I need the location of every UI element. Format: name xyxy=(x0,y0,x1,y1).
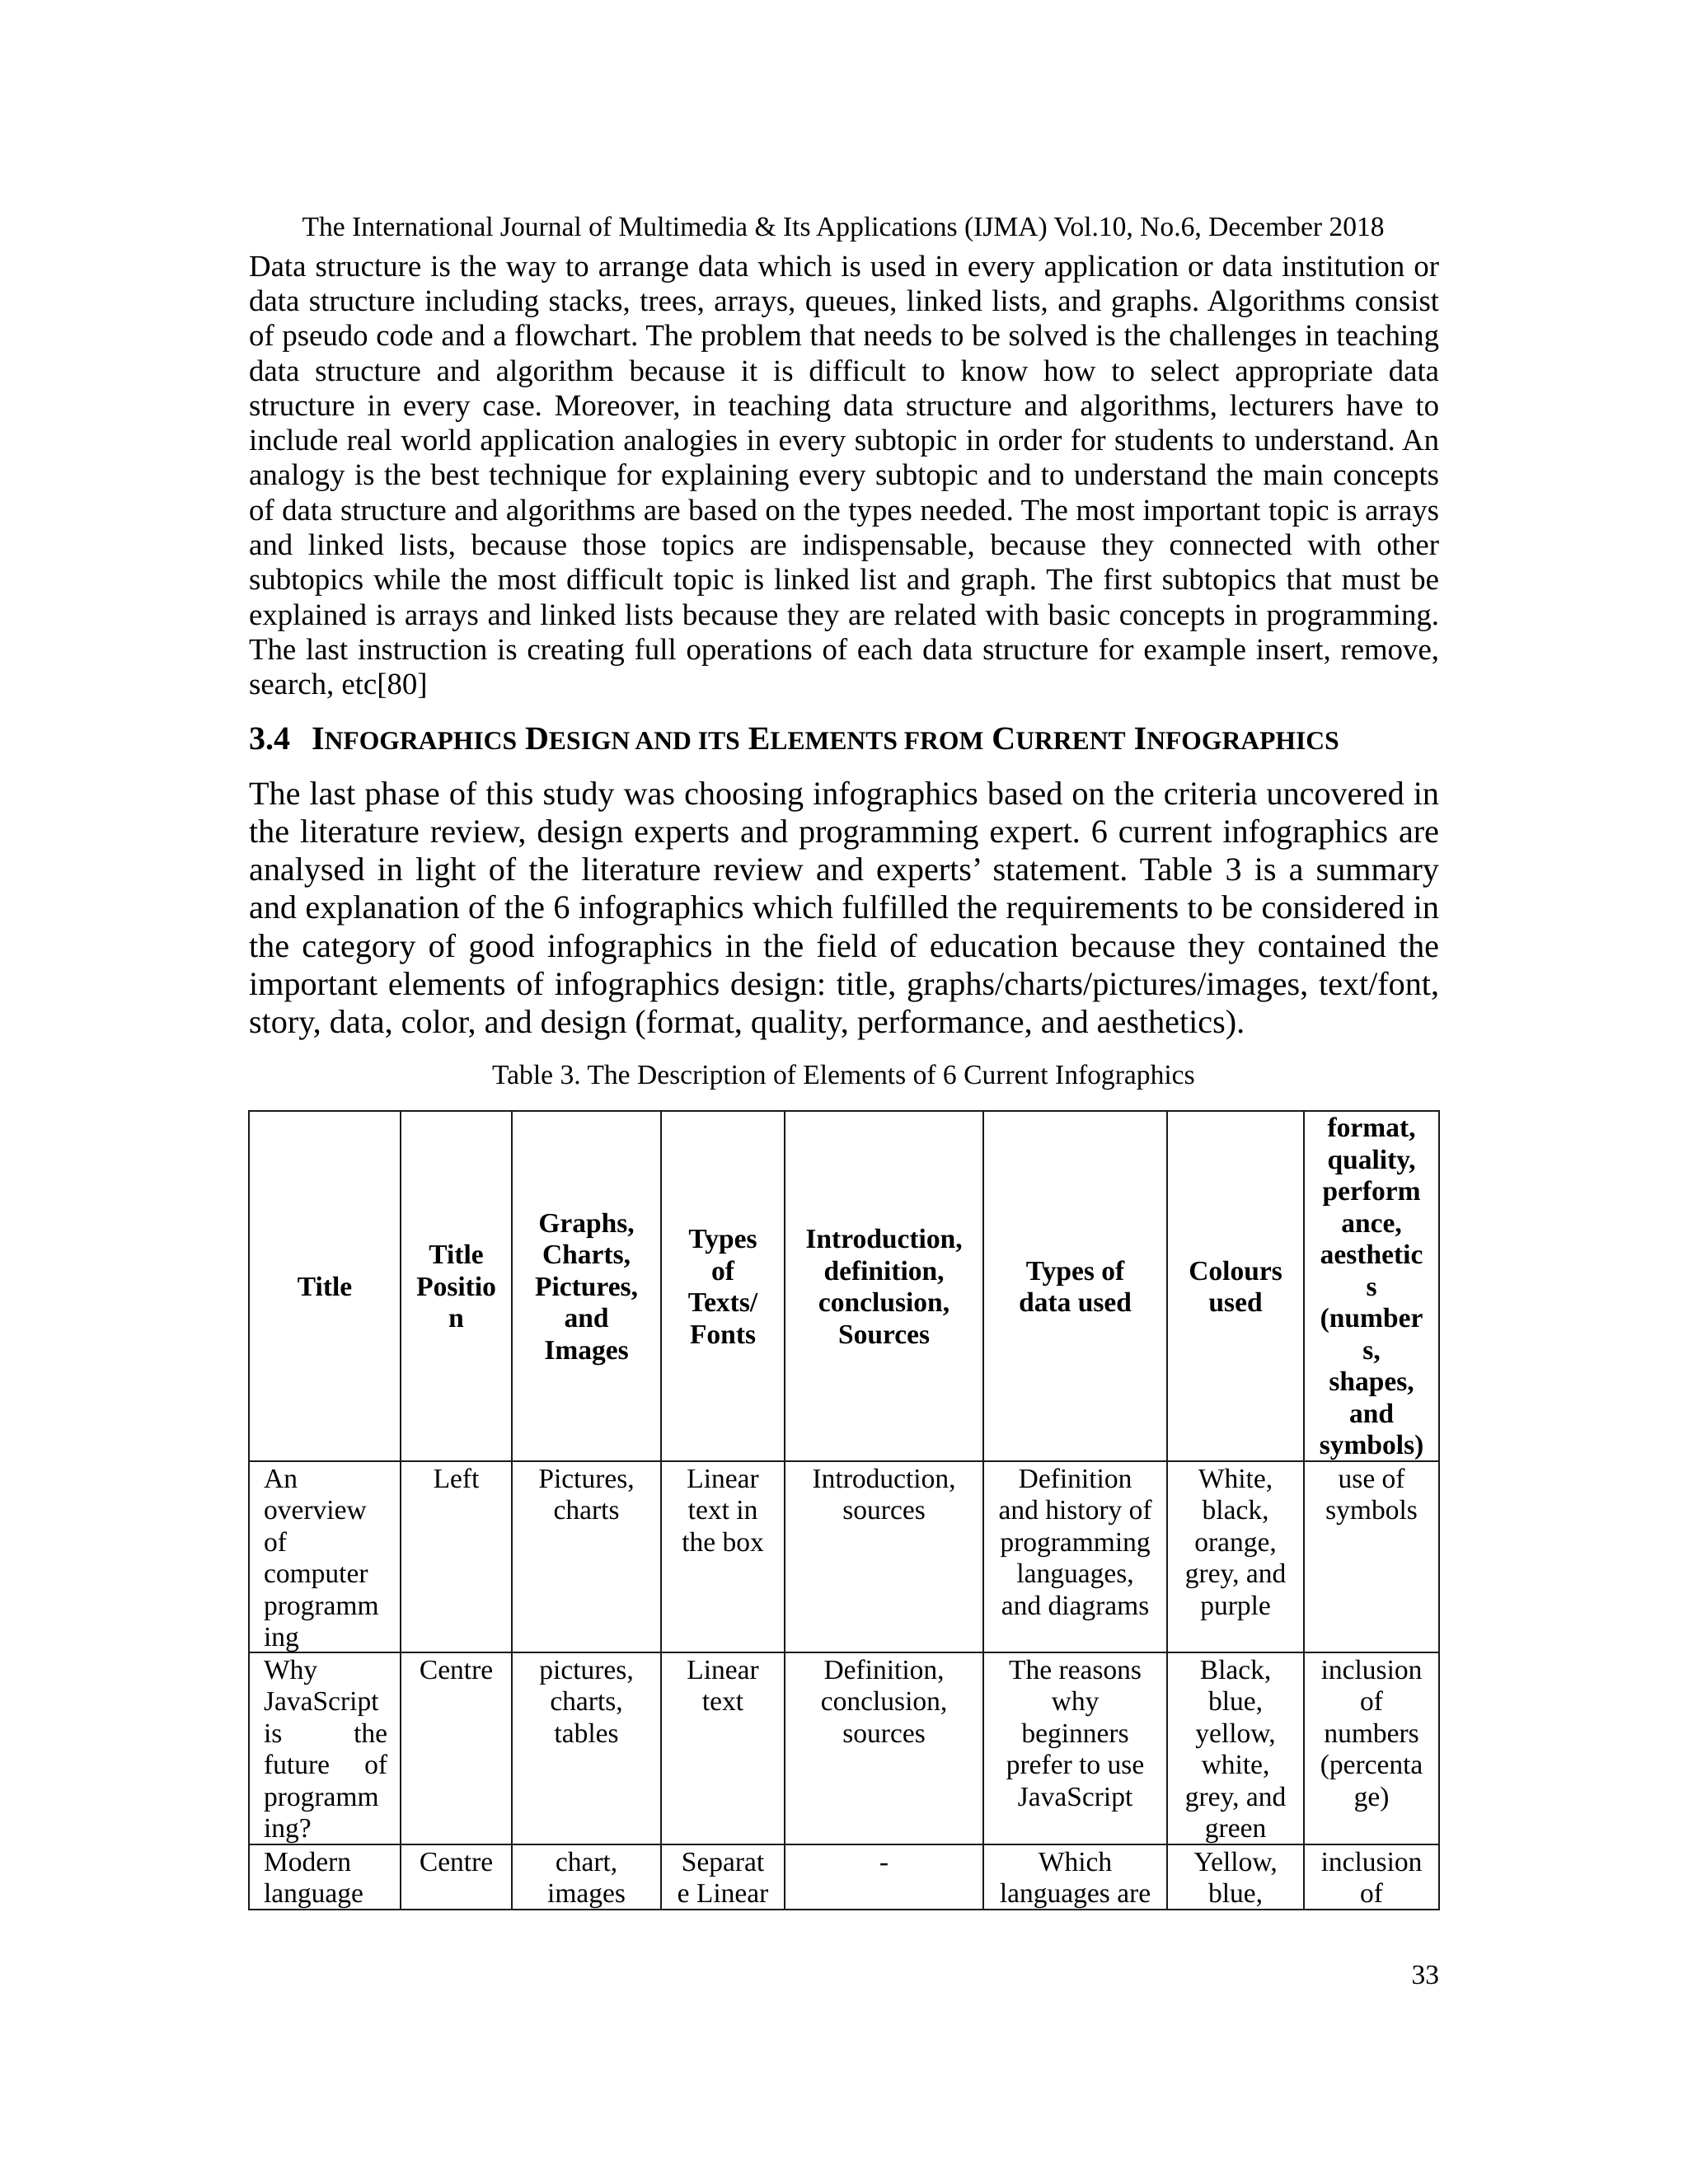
header cell: format, quality, performance, aesthetics: symbols) xyxy=(1320,1430,1423,1460)
table 3: elements of infographics xyxy=(248,1110,1440,1910)
cell: title xyxy=(250,1462,400,1652)
header cell: Types of Texts/Fonts: of xyxy=(711,1256,734,1286)
header cell: format, quality, performance, aesthetics: shapes, xyxy=(1329,1366,1414,1397)
header cell: Types of data used: Types of xyxy=(1026,1256,1124,1286)
table row: Why JavaScript is the future of programming? xyxy=(250,1653,1438,1844)
cell: graphics: images xyxy=(547,1878,626,1909)
cell: graphics: tables xyxy=(554,1718,619,1749)
header cell: Colours used xyxy=(1168,1112,1303,1460)
cell: title: ing? xyxy=(264,1813,312,1844)
cell: title: computer xyxy=(264,1558,368,1589)
cell: colours: white, xyxy=(1202,1750,1269,1780)
header cell: Title Position xyxy=(401,1112,511,1460)
cell: data types: The reasons xyxy=(1009,1655,1142,1685)
text block: last phase of study paragraph: The last phase of this study was choosing infographics based on the criteria uncovered in xyxy=(249,775,1439,812)
cell: format xyxy=(1305,1845,1438,1909)
cell: text types: the box xyxy=(682,1526,764,1558)
cell: colours: Yellow, xyxy=(1193,1846,1278,1877)
cell: data types xyxy=(984,1653,1166,1844)
cell: colours: White, xyxy=(1198,1464,1273,1493)
cell: introduction: Introduction, xyxy=(813,1464,955,1493)
cell: colours: purple xyxy=(1200,1591,1271,1620)
cell: text types: text xyxy=(702,1686,743,1717)
cell: title: programm xyxy=(264,1591,379,1620)
cell: data types: and history of xyxy=(998,1495,1152,1526)
cell: introduction: sources xyxy=(842,1718,926,1749)
cell: text types xyxy=(662,1653,784,1844)
cell: position xyxy=(401,1653,511,1844)
text block: data structure paragraph: search, etc[80] xyxy=(249,667,428,701)
cell: text types: e Linear xyxy=(678,1878,768,1909)
header cell: format, quality, performance, aesthetics xyxy=(1305,1112,1438,1460)
cell: format: inclusion xyxy=(1321,1655,1422,1685)
cell: format: use of xyxy=(1339,1464,1404,1493)
cell: colours: yellow, xyxy=(1195,1718,1276,1749)
cell: position xyxy=(401,1462,511,1652)
text block: last phase of study paragraph: and explanation of the 6 infographics which fulfilled the requirements to be considered in xyxy=(249,888,1439,926)
cell: graphics xyxy=(513,1653,660,1844)
text block: data structure paragraph: Data structure is the way to arrange data which is used in every application or data institution or xyxy=(249,249,1439,283)
header cell: Title: Title xyxy=(298,1272,352,1302)
cell: graphics: charts, xyxy=(550,1686,623,1717)
header cell: format, quality, performance, aesthetics: (number xyxy=(1320,1303,1423,1333)
cell: text types xyxy=(662,1845,784,1909)
header cell: format, quality, performance, aesthetics: perform xyxy=(1322,1176,1421,1207)
cell: format: of xyxy=(1360,1878,1383,1909)
text block: data structure paragraph: data structure including stacks, trees, arrays, queues, linked lists, and graphs. Algorithms consist xyxy=(249,284,1439,317)
cell: format xyxy=(1305,1653,1438,1844)
header cell: Introduction, definition, conclusion, Sources xyxy=(785,1112,982,1460)
cell: introduction xyxy=(785,1653,982,1844)
cell: position: Centre xyxy=(420,1655,493,1685)
text block: last phase of study paragraph: story, data, color, and design (format, quality, performance, and aesthetics). xyxy=(249,1003,1245,1040)
header cell: Graphs, Charts, Pictures, and Images: and xyxy=(564,1303,608,1333)
cell: title: of xyxy=(264,1526,287,1558)
header cell: Graphs, Charts, Pictures, and Images: Images xyxy=(544,1335,629,1366)
header cell: Types of Texts/Fonts: Types xyxy=(688,1224,757,1254)
cell: format: of xyxy=(1360,1686,1383,1717)
header cell: format, quality, performance, aesthetics: s xyxy=(1366,1272,1377,1302)
header cell: Introduction, definition, conclusion, Sources: conclusion, xyxy=(818,1287,950,1318)
cell: title xyxy=(250,1845,400,1909)
cell: title: Modern xyxy=(264,1846,351,1877)
page number: 33 xyxy=(1411,1960,1439,1990)
header cell: Types of Texts/Fonts: Texts/ xyxy=(688,1287,757,1318)
header cell: Introduction, definition, conclusion, Sources: definition, xyxy=(823,1256,945,1286)
text block: data structure paragraph: explained is arrays and linked lists because they are related with basic concepts in programming. xyxy=(249,598,1439,631)
cell: data types: Definition xyxy=(1019,1464,1132,1493)
header cell: Introduction, definition, conclusion, Sources: Sources xyxy=(838,1319,930,1350)
cell: title xyxy=(250,1653,400,1844)
text block: data structure paragraph: The last instruction is creating full operations of each data structure for example insert, remove, xyxy=(249,632,1439,666)
cell: graphics: pictures, xyxy=(539,1655,634,1685)
header cell: format, quality, performance, aesthetics: and xyxy=(1349,1399,1394,1429)
cell: colours xyxy=(1168,1462,1303,1652)
cell: colours xyxy=(1168,1845,1303,1909)
cell: title: is the xyxy=(264,1718,387,1749)
cell: introduction: - xyxy=(879,1846,889,1877)
cell: colours: orange, xyxy=(1194,1526,1277,1558)
header cell: Types of data used xyxy=(984,1112,1166,1460)
cell: title: ing xyxy=(264,1622,299,1652)
cell: data types: and diagrams xyxy=(1001,1591,1149,1620)
cell: data types: prefer to use xyxy=(1006,1750,1144,1780)
header cell: format, quality, performance, aesthetics: ance, xyxy=(1341,1208,1402,1239)
cell: data types: languages are xyxy=(1000,1878,1151,1909)
text block: data structure paragraph xyxy=(249,249,1439,701)
cell: title: language xyxy=(264,1878,363,1909)
cell: format xyxy=(1305,1462,1438,1652)
text block: last phase of study paragraph: the category of good infographics in the field of education because they contained the xyxy=(249,927,1439,964)
cell: title: An xyxy=(264,1464,298,1493)
header cell: Types of data used: data used xyxy=(1019,1287,1132,1318)
table row: An overview of computer programming xyxy=(250,1462,1438,1652)
header cell: Graphs, Charts, Pictures, and Images: Charts, xyxy=(542,1240,631,1270)
cell: introduction: sources xyxy=(842,1495,926,1526)
cell: text types: text in xyxy=(688,1495,757,1526)
cell: data types: JavaScript xyxy=(1018,1782,1132,1811)
cell: format: numbers xyxy=(1324,1718,1419,1749)
header cell: Graphs, Charts, Pictures, and Images: Pictures, xyxy=(535,1272,638,1302)
cell: colours: blue, xyxy=(1208,1686,1263,1717)
text block: data structure paragraph: of pseudo code and a flowchart. The problem that needs to be solved is the challenges in teaching xyxy=(249,318,1439,352)
cell: colours: Black, xyxy=(1200,1655,1271,1685)
cell: graphics: charts xyxy=(554,1495,620,1526)
header cell: Types of Texts/Fonts: Fonts xyxy=(690,1319,756,1350)
cell: title: overview xyxy=(264,1495,367,1526)
cell: introduction xyxy=(785,1462,982,1652)
cell: data types: programming xyxy=(1000,1526,1151,1558)
header cell: Title Position: n xyxy=(448,1303,464,1333)
text block: data structure paragraph: data structure and algorithm because it is difficult to know how to select appropriate data xyxy=(249,354,1439,387)
header cell: format, quality, performance, aesthetics: aesthetic xyxy=(1320,1240,1423,1270)
cell: introduction: conclusion, xyxy=(821,1686,947,1717)
cell: graphics xyxy=(513,1845,660,1909)
cell: introduction xyxy=(785,1845,982,1909)
cell: colours xyxy=(1168,1653,1303,1844)
header cell: Graphs, Charts, Pictures, and Images: Graphs, xyxy=(538,1208,635,1239)
cell: text types: Linear xyxy=(687,1655,759,1685)
cell: colours: black, xyxy=(1203,1495,1268,1526)
header cell: format, quality, performance, aesthetics: s, xyxy=(1362,1335,1381,1366)
cell: data types: why xyxy=(1052,1686,1099,1717)
cell: title: JavaScript programm xyxy=(264,1686,379,1811)
cell: format: inclusion xyxy=(1321,1846,1422,1877)
cell: graphics: Pictures, xyxy=(538,1464,635,1493)
header cell: Title Position: Positio xyxy=(416,1272,496,1302)
text block: data structure paragraph: include real world application analogies in every subtopic in order for students to understand. An xyxy=(249,423,1439,457)
running header: The International Journal of Multimedia & Its Applications (IJMA) Vol.10, No.6, December 2018 xyxy=(302,211,1385,242)
section heading 3.4: 3.4 INFOGRAPHICS DESIGN AND ITS ELEMENTS FROM CURRENT INFOGRAPHICS xyxy=(249,719,1339,757)
text block: last phase of study paragraph: analysed in light of the literature review and experts’ statement. Table 3 is a summary xyxy=(249,851,1439,888)
header cell: format, quality, performance, aesthetics: format, xyxy=(1328,1113,1415,1143)
text block: data structure paragraph: subtopics while the most difficult topic is linked list and graph. The first subtopics that must be xyxy=(249,562,1439,596)
cell: position: Centre xyxy=(420,1846,493,1877)
header cell: Introduction, definition, conclusion, Sources: Introduction, xyxy=(805,1224,963,1254)
text block: data structure paragraph: and linked lists, because those topics are indispensable, because they connected with other xyxy=(249,527,1439,561)
header cell: Colours used: Colours xyxy=(1189,1256,1282,1286)
header cell: Title Position: Title xyxy=(429,1240,484,1270)
table caption: Table 3. The Description of Elements of 6 Current Infographics xyxy=(492,1060,1195,1090)
text block: last phase of study paragraph: the literature review, design experts and programming expert. 6 current infographics are xyxy=(249,813,1439,850)
cell: format: symbols xyxy=(1325,1495,1418,1526)
cell: data types: Which xyxy=(1039,1846,1112,1877)
cell: position xyxy=(401,1845,511,1909)
cell: colours: blue, xyxy=(1208,1878,1263,1909)
cell: text types xyxy=(662,1462,784,1652)
cell: data types xyxy=(984,1462,1166,1652)
cell: introduction: Definition, xyxy=(823,1655,945,1685)
cell: graphics: chart, xyxy=(556,1846,617,1877)
cell: colours: grey, and xyxy=(1185,1558,1286,1589)
cell: data types: languages, xyxy=(1016,1558,1134,1589)
header cell: Title xyxy=(250,1112,400,1460)
cell: position: Left xyxy=(434,1464,479,1493)
header cell: Colours used: used xyxy=(1208,1287,1263,1318)
cell: text types: Separat xyxy=(682,1846,764,1877)
cell: format: (percenta xyxy=(1320,1750,1423,1780)
header cell: Graphs, Charts, Pictures, and Images xyxy=(513,1112,660,1460)
cell: colours: green xyxy=(1205,1813,1266,1844)
cell: format: ge) xyxy=(1354,1782,1389,1811)
text block: last phase of study paragraph: important elements of infographics design: title, graphs/charts/pictures/images, text/font, xyxy=(249,965,1439,1002)
cell: title: future of xyxy=(264,1750,387,1780)
table header row xyxy=(250,1112,1438,1460)
cell: data types: beginners xyxy=(1021,1718,1129,1749)
text block: data structure paragraph: of data structure and algorithms are based on the types needed. The most important topic is arrays xyxy=(249,493,1439,527)
header cell: Types of Texts/Fonts xyxy=(662,1112,784,1460)
text block: data structure paragraph: structure in every case. Moreover, in teaching data structure and algorithms, lecturers have to xyxy=(249,388,1439,422)
header cell: format, quality, performance, aesthetics: quality, xyxy=(1327,1145,1416,1175)
cell: data types xyxy=(984,1845,1166,1909)
cell: text types: Linear xyxy=(687,1464,759,1493)
cell: colours: grey, and xyxy=(1185,1782,1286,1811)
cell: graphics xyxy=(513,1462,660,1652)
table row: Modern language xyxy=(250,1845,1438,1909)
text block: data structure paragraph: analogy is the best technique for explaining every subtopic and to understand the main concepts xyxy=(249,457,1439,491)
text block: last phase of study paragraph xyxy=(249,775,1439,1040)
cell: title: Why xyxy=(264,1655,317,1685)
